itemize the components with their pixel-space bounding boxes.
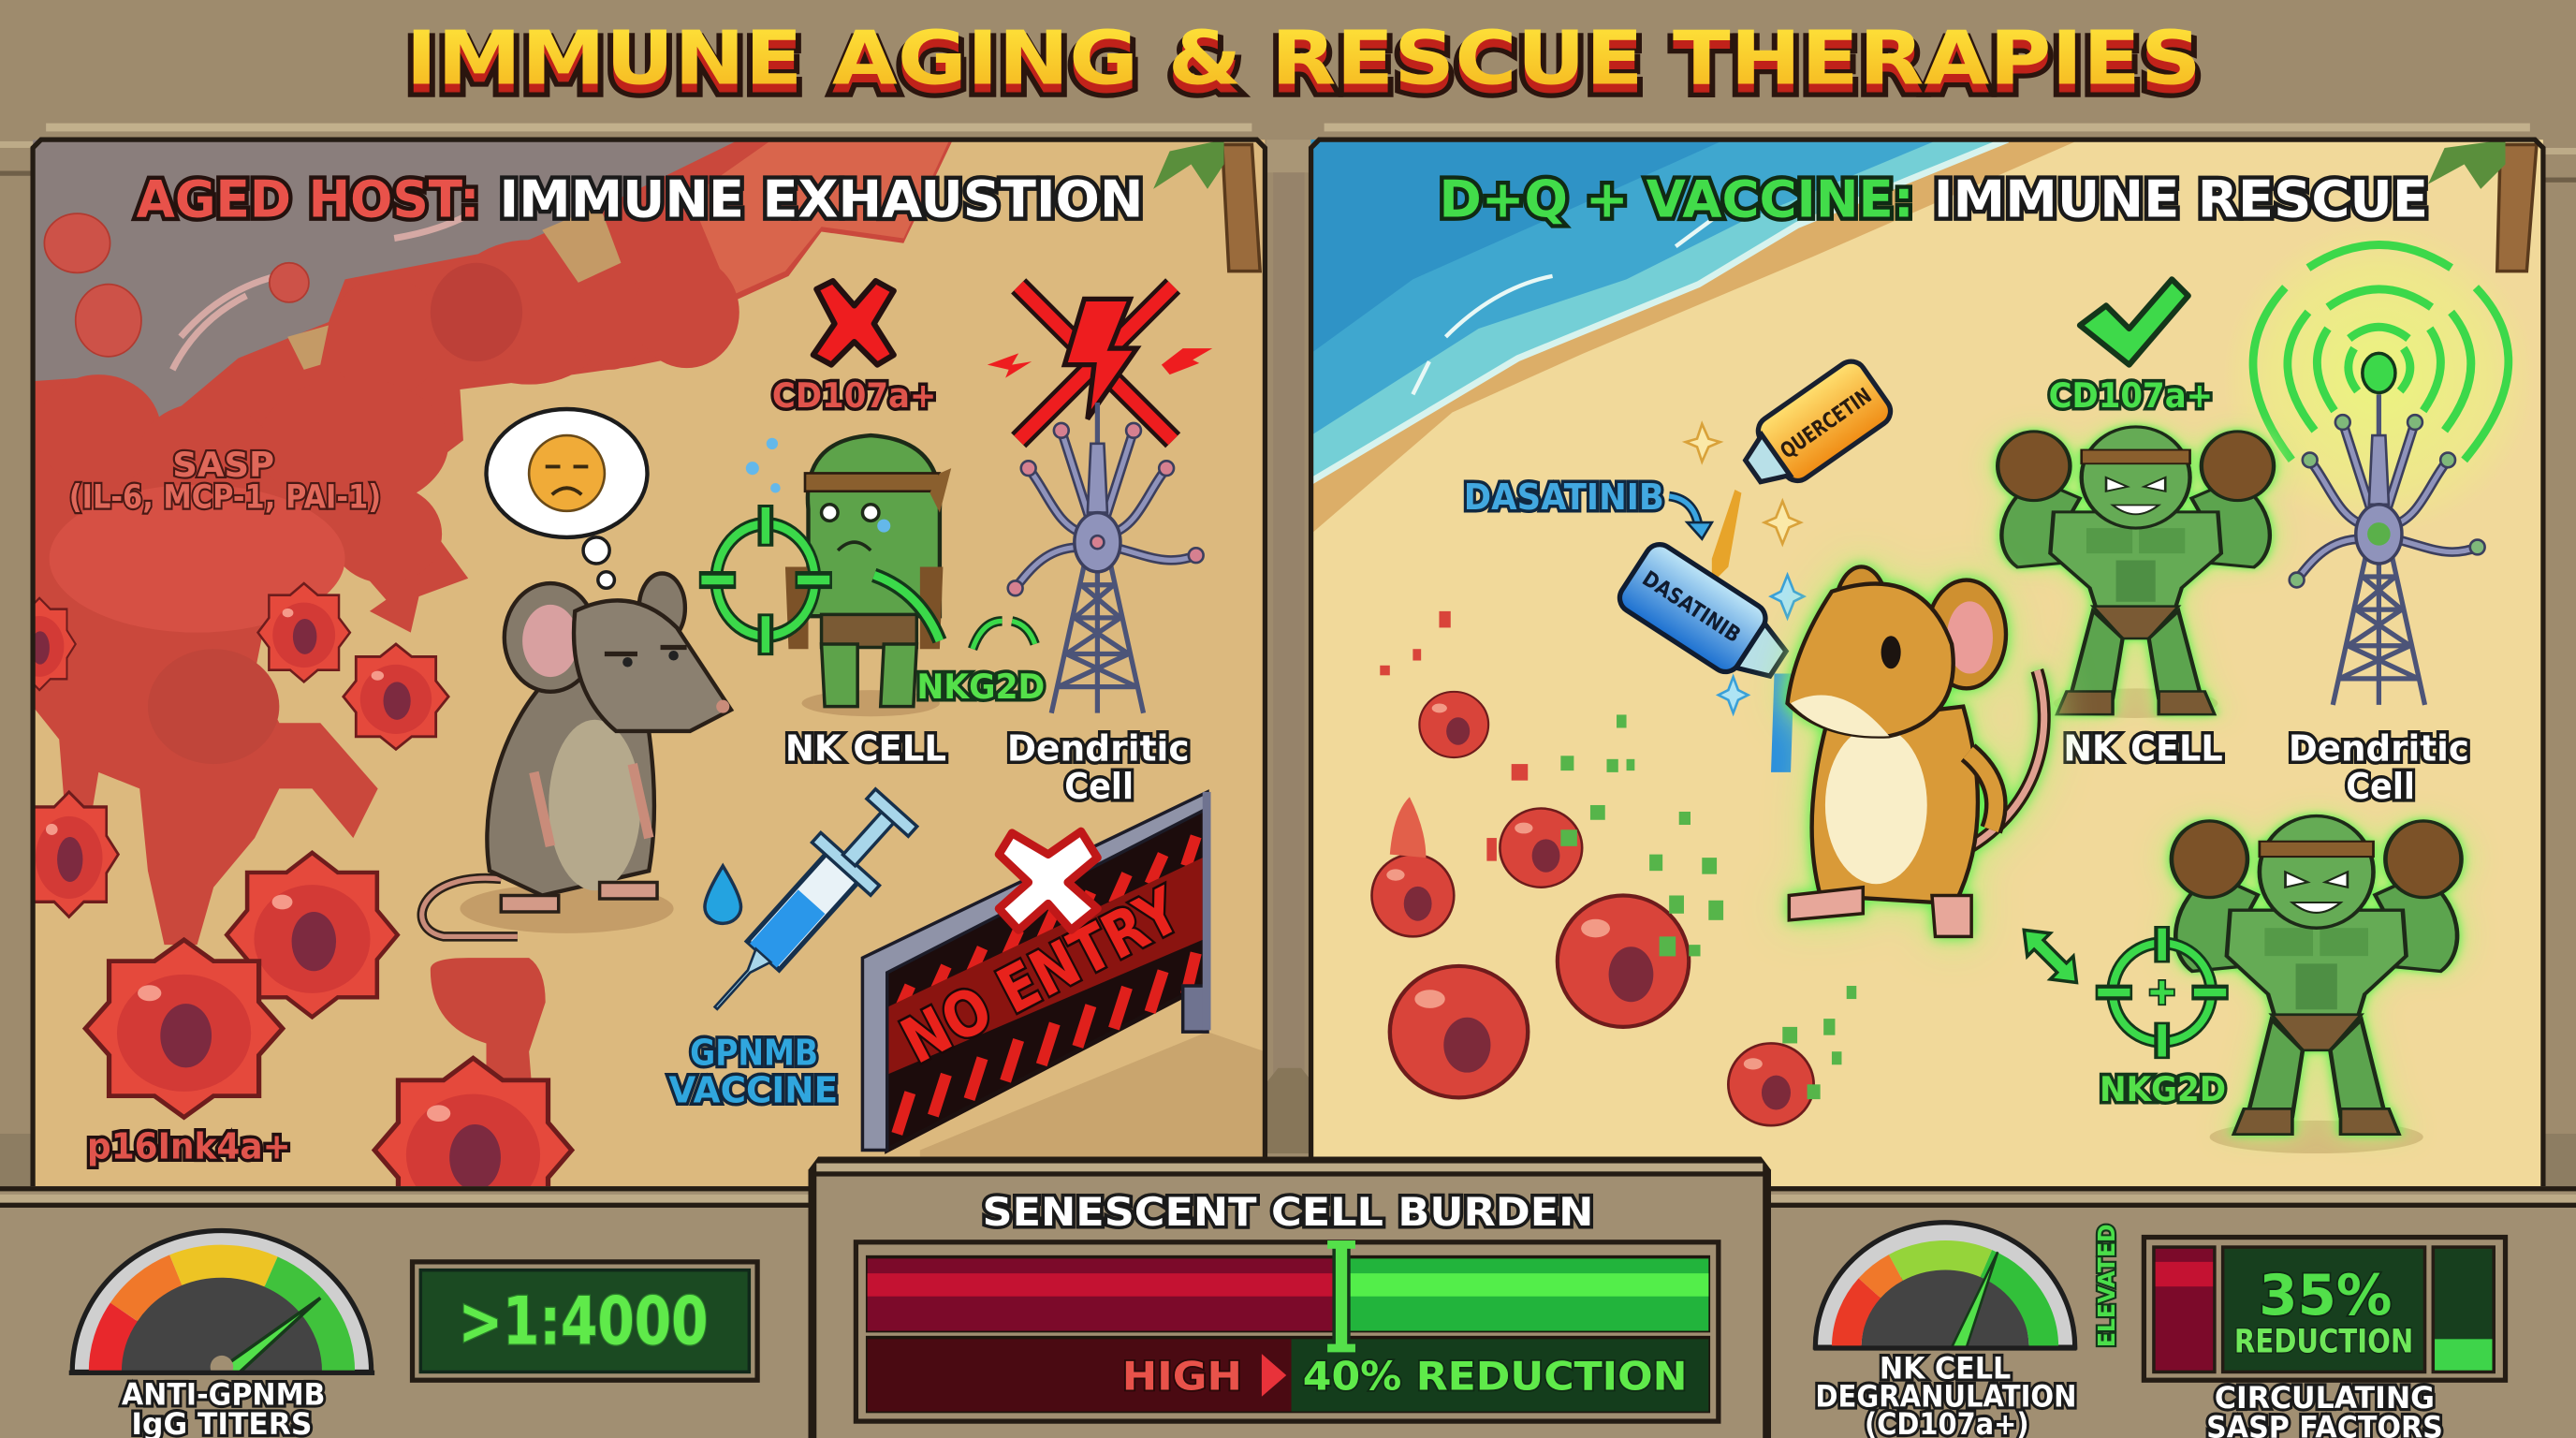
large strong NK cell — [2172, 816, 2461, 1153]
palm tree — [2428, 139, 2537, 271]
CD107a label active: CD107a+ — [2049, 375, 2213, 416]
reduction label: 40% REDUCTION — [1303, 1354, 1687, 1400]
p16 label: p16Ink4a+ — [87, 1125, 291, 1167]
dasatinib bottle: DASATINIB — [1638, 566, 1745, 648]
gauge label — [122, 1379, 326, 1438]
vaccine droplet — [705, 866, 741, 923]
exhausted NK cell — [746, 435, 951, 716]
NKG2D label: NKG2D — [916, 667, 1045, 707]
crosshair: active NKG2D — [2096, 926, 2229, 1059]
gauge: NK degranulation — [1814, 1223, 2076, 1351]
dasatinib label and arrow — [1464, 477, 1712, 539]
NKG2D label: NKG2D — [2100, 1069, 2226, 1109]
dendritic label: Cell — [1064, 766, 1134, 808]
signal glow — [2251, 250, 2504, 506]
icon: green check — [2080, 279, 2188, 365]
no entry barrier — [862, 792, 1265, 1186]
panel: rescue — [1311, 139, 2543, 1186]
happy mouse — [1788, 566, 2044, 936]
readout: titer — [413, 1262, 757, 1380]
syringe — [713, 786, 919, 1011]
NK cell label: NK CELL — [2063, 728, 2223, 770]
main title: IMMUNE AGING & RESCUE THERAPIES — [406, 16, 2202, 102]
panel: aged host — [4, 139, 1265, 1242]
dendritic label: Dendritic — [1007, 728, 1190, 770]
gauge label — [1815, 1352, 2076, 1438]
blue stream — [1771, 674, 1794, 772]
GPNMB vaccine label: GPNMB — [690, 1032, 818, 1074]
sparkles — [1686, 424, 1804, 713]
double arrow — [2024, 930, 2076, 983]
green arrows — [874, 575, 1035, 649]
section heading: aged host: IMMUNE EXHAUSTION — [500, 170, 1144, 229]
section heading: rescue: D+Q + VACCINE: — [1439, 170, 1914, 229]
SASP label — [2206, 1382, 2443, 1438]
crosshair: weak NKG2D — [699, 505, 832, 655]
section heading: rescue: IMMUNE RESCUE — [1934, 170, 2428, 229]
dying senescent cells — [1372, 611, 1814, 1125]
gauge label: DEGRANULATION — [1815, 1380, 2076, 1414]
grey polluted sky — [33, 139, 734, 418]
signal rings — [2253, 244, 2509, 460]
strong NK cell — [1998, 427, 2274, 718]
NK cell label: NK CELL — [785, 728, 946, 770]
section heading: rescue — [1439, 170, 2428, 229]
GPNMB vaccine label: VACCINE — [668, 1070, 838, 1112]
quercetin stream — [1712, 490, 1741, 583]
burden heading: SENESCENT CELL BURDEN — [983, 1189, 1593, 1235]
readout: titer: >1:4000 — [459, 1284, 708, 1360]
detached smoke puffs — [44, 213, 309, 357]
divider marker — [1327, 1240, 1355, 1352]
SASP label: CIRCULATING — [2215, 1382, 2435, 1416]
palm tree — [1153, 139, 1260, 271]
SASP label: SASP — [172, 445, 274, 485]
gauge label: NK CELL — [1880, 1352, 2011, 1386]
section heading: aged host — [131, 175, 1143, 222]
dasatinib label and arrow: DASATINIB — [1464, 477, 1664, 519]
icon: crossed lightning — [988, 286, 1212, 440]
panel: bottom left stats — [0, 1186, 813, 1438]
senescent cells — [36, 582, 575, 1186]
SASP meter: REDUCTION — [2234, 1322, 2413, 1360]
quercetin bottle — [1733, 356, 1896, 501]
green particles — [1560, 714, 1856, 1099]
dendritic label: Cell — [2346, 766, 2415, 808]
main title: IMMUNE AGING & RESCUE THERAPIES — [406, 23, 2202, 110]
SASP meter: 35% — [2259, 1264, 2392, 1328]
panel borders — [33, 139, 2543, 1186]
GPNMB vaccine label — [668, 1032, 838, 1112]
gauge label: ANTI-GPNMB — [122, 1379, 326, 1413]
wet sand — [1311, 139, 2080, 534]
dendritic cell tower active — [2290, 353, 2485, 705]
SASP label — [69, 445, 381, 516]
thought bubble — [487, 409, 648, 588]
SASP meter — [2144, 1238, 2506, 1380]
arrow marker — [1262, 1354, 1286, 1397]
dendritic label — [1007, 728, 1190, 808]
dendritic label — [2289, 728, 2469, 808]
section heading: aged host: AGED HOST: — [137, 170, 479, 229]
quercetin bottle: QUERCETIN — [1777, 384, 1876, 464]
dendritic label: Dendritic — [2289, 728, 2469, 770]
SASP label: (IL-6, MCP-1, PAI-1) — [69, 477, 381, 516]
red SASP cloud — [33, 139, 953, 945]
panel: bottom right stats — [1766, 1186, 2576, 1438]
tired grey rat — [422, 574, 731, 936]
high label: HIGH — [1122, 1354, 1242, 1400]
no entry barrier: NO ENTRY — [890, 873, 1193, 1078]
icon: red X for CD107a — [813, 281, 894, 365]
gauge: anti-GPNMB — [69, 1231, 374, 1378]
burden bar chart — [856, 1240, 1719, 1421]
sea — [1311, 139, 2008, 481]
CD107a label failed: CD107a+ — [772, 375, 936, 416]
dendritic cell tower — [1008, 403, 1204, 713]
elevated label: ELEVATED — [2093, 1224, 2120, 1347]
panel: senescent cell burden — [809, 1157, 1771, 1438]
dasatinib bottle — [1614, 539, 1798, 696]
